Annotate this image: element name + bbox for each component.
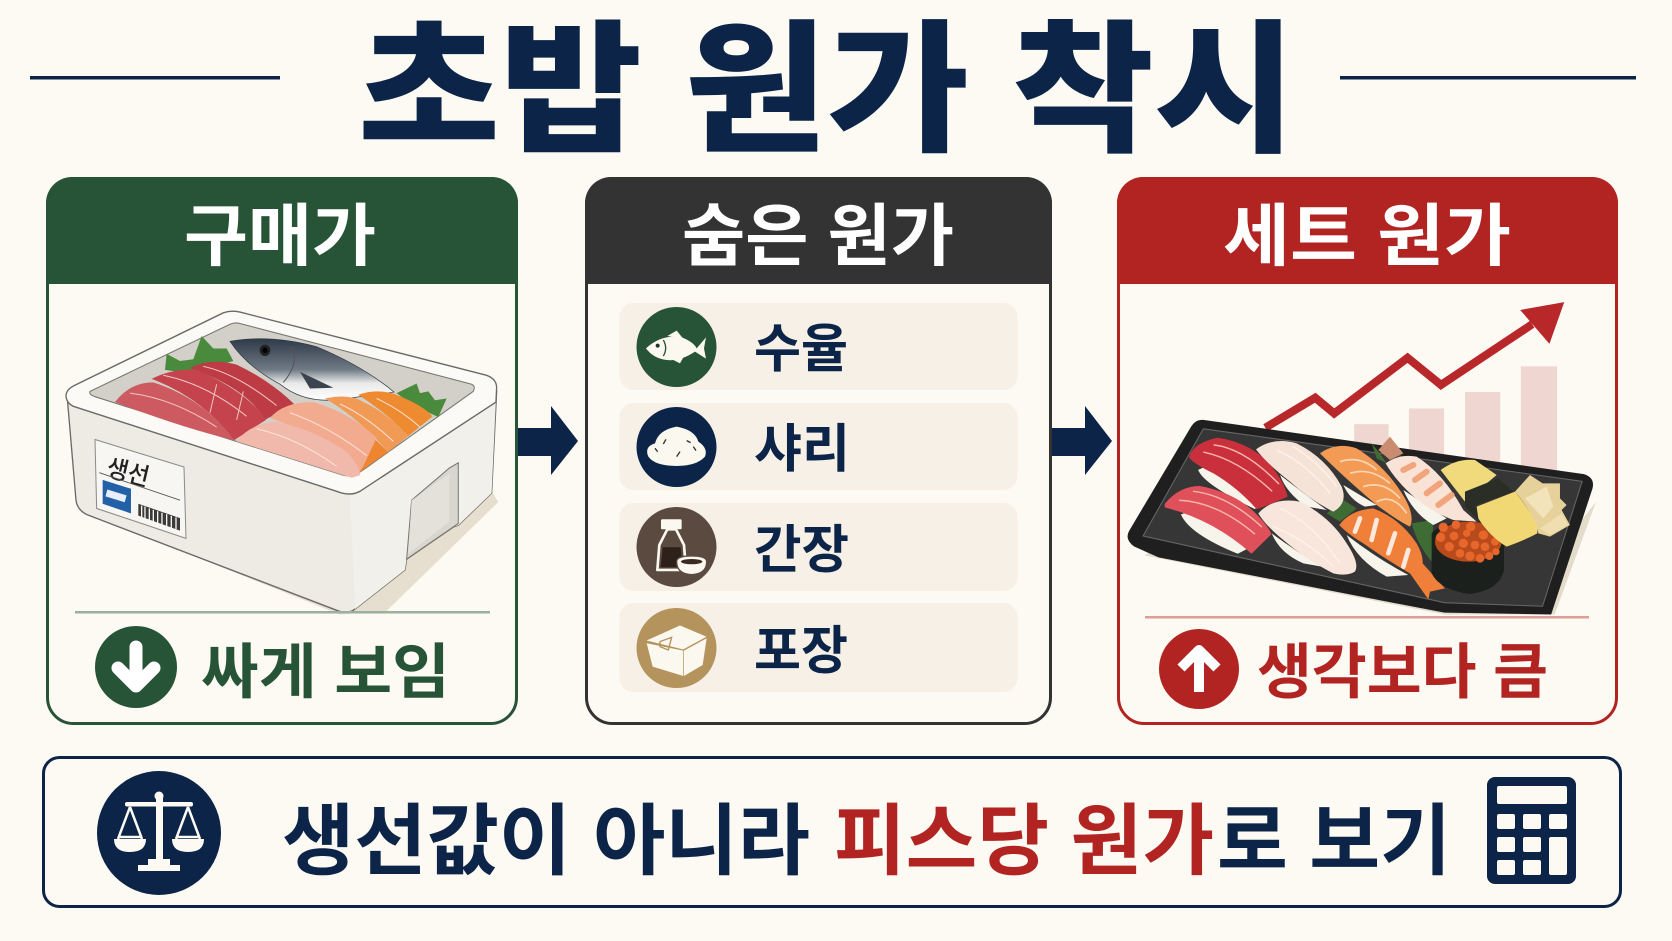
leaves under sushi xyxy=(1327,443,1433,562)
salmon slices xyxy=(358,391,433,436)
title: 초밥 원가 착시 xyxy=(358,12,1296,171)
shrimp lower xyxy=(1339,508,1445,599)
tamago xyxy=(1441,460,1537,547)
ginger xyxy=(1515,475,1570,537)
label sticker xyxy=(95,440,186,538)
panel: hidden cost xyxy=(585,177,1052,724)
panel: set cost xyxy=(1117,177,1618,724)
panel header: 숨은 원가 xyxy=(585,177,1052,284)
banner text xyxy=(282,797,1451,885)
title xyxy=(30,12,1636,171)
row: 간장 xyxy=(620,503,1018,591)
tuna slices xyxy=(190,362,294,420)
row: 포장: 포장 xyxy=(754,623,848,681)
row: 수율 xyxy=(620,303,1018,390)
salmon nigiri xyxy=(1320,446,1412,527)
gunkan roe xyxy=(1432,520,1504,594)
panel header: 구매가 xyxy=(46,177,518,284)
row: 간장: 간장 xyxy=(754,522,849,580)
banner text: 생선값이 아니라 xyxy=(282,797,810,885)
icon: calculator xyxy=(1487,777,1576,884)
panel header: 세트 원가 xyxy=(1117,177,1618,284)
panel header: 세트 원가: 세트 원가 xyxy=(1223,199,1511,275)
arrow: purchase to hidden cost xyxy=(518,406,578,475)
white nigiri lower xyxy=(1258,501,1356,575)
row: 샤리 xyxy=(620,403,1018,490)
divider xyxy=(1145,616,1589,618)
rising bars xyxy=(1354,366,1557,470)
badge: down arrow xyxy=(95,626,177,708)
arrow: hidden cost to set cost xyxy=(1052,406,1112,475)
illustration: styrofoam fish box: 생선 xyxy=(104,454,152,492)
row: 수율: 수율 xyxy=(754,321,848,379)
takeaway banner xyxy=(44,758,1620,906)
row: 포장 xyxy=(620,603,1018,692)
panel header: 숨은 원가: 숨은 원가 xyxy=(682,199,954,275)
illustration: styrofoam fish box xyxy=(66,311,498,614)
tray xyxy=(1128,420,1596,614)
rising arrow xyxy=(1265,302,1564,428)
leaves xyxy=(165,336,447,417)
badge: up arrow xyxy=(1159,629,1239,709)
caption: 싸게 보임: 싸게 보임 xyxy=(201,639,450,706)
panel header: 구매가: 구매가 xyxy=(184,199,376,275)
banner text: 로 보기 xyxy=(1217,797,1451,885)
shrimp upper xyxy=(1386,456,1477,525)
white nigiri upper xyxy=(1256,441,1344,512)
caption: 생각보다 큼: 생각보다 큼 xyxy=(1257,639,1548,706)
mackerel xyxy=(230,339,394,400)
row: 샤리: 샤리 xyxy=(754,421,850,479)
icon: balance scale xyxy=(97,771,221,895)
illustration: rising chart and sushi tray xyxy=(1128,302,1596,614)
banner text: 피스당 원가 xyxy=(834,797,1214,885)
panel: purchase price xyxy=(46,177,518,724)
left nigiri xyxy=(1165,438,1288,554)
divider xyxy=(75,611,490,614)
